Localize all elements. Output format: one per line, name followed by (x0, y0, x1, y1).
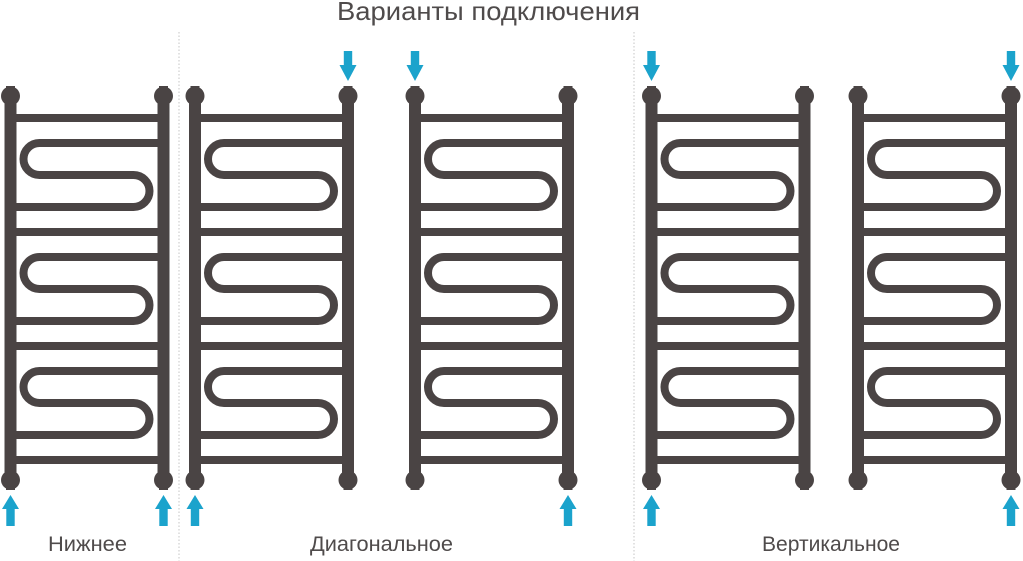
arrow: down, radiator 5 right (1002, 51, 1020, 81)
arrow: up, radiator 1 right (155, 495, 172, 526)
radiator 2: diagonal connection (186, 86, 358, 490)
arrow: down, radiator 2 right (340, 51, 356, 81)
arrow: down, radiator 3 left (406, 51, 424, 81)
arrow: up, radiator 5 right (1002, 495, 1020, 526)
label: bottom: Нижнее (48, 533, 127, 556)
arrow: up, radiator 1 left (2, 495, 19, 526)
arrow: down, radiator 4 left (643, 51, 660, 81)
label: diagonal: Диагональное (310, 533, 453, 556)
arrow: up, radiator 3 right (560, 495, 576, 526)
divider: right (633, 32, 635, 561)
radiator 1: bottom connection (1, 86, 173, 490)
label: vertical: Вертикальное (762, 533, 900, 556)
radiator 3: diagonal connection (406, 86, 578, 490)
arrow: up, radiator 4 left (643, 495, 660, 526)
radiator 4: vertical connection (642, 86, 814, 490)
arrow: up, radiator 2 left (186, 495, 204, 526)
radiator 5: vertical connection (848, 86, 1020, 490)
divider: left (178, 32, 180, 561)
